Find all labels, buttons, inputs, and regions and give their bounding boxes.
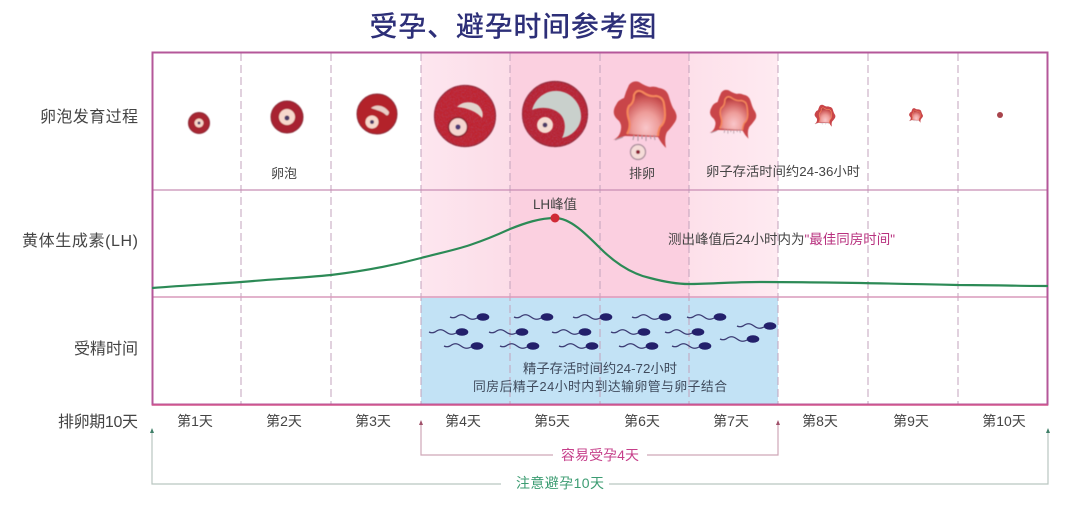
arrow: easy conception range (419, 420, 780, 455)
icon: remnant day 10 (997, 112, 1003, 118)
chart: LH curve (152, 214, 1048, 288)
icon: ruptured follicle day 7 (709, 90, 756, 139)
day labels: 第10天 (982, 413, 1026, 429)
icon: follicle day 2 (271, 101, 303, 133)
title: 受孕、避孕时间参考图 (370, 11, 656, 42)
row label: follicle development: 卵泡发育过程 (40, 108, 138, 126)
icon: ruptured follicle day 6 (613, 81, 677, 148)
icon: released egg (630, 144, 646, 160)
day labels: 第5天 (534, 413, 570, 429)
callout: best timing: 测出峰值后24小时内为"最佳同房时间" (668, 232, 895, 247)
day labels: 第6天 (624, 413, 660, 429)
text: sperm survival: 精子存活时间约24-72小时 (523, 361, 677, 376)
day labels: 第1天 (177, 413, 213, 429)
label: LH peak: LH峰值 (533, 197, 577, 212)
row label: LH: 黄体生成素(LH) (22, 232, 138, 250)
day labels: 第4天 (445, 413, 481, 429)
icon: follicle day 3 (357, 94, 397, 134)
blue fertilisation band (421, 298, 778, 404)
label: follicle: 卵泡 (271, 166, 297, 181)
icon: follicle day 5 (522, 82, 588, 146)
pink highlight bands (421, 53, 778, 298)
label: easy conception 4 days: 容易受孕4天 (561, 447, 639, 463)
day labels (177, 413, 1026, 429)
label: ovulation: 排卵 (629, 166, 655, 181)
label: egg survival: 卵子存活时间约24-36小时 (706, 164, 860, 179)
LH peak marker (550, 214, 560, 222)
day labels: 第7天 (713, 413, 749, 429)
row label: fertilisation time: 受精时间 (74, 340, 138, 358)
panel: chart grid (152, 52, 1048, 405)
day labels: 第8天 (802, 413, 838, 429)
arrow: contraception range (150, 428, 1050, 484)
label: contraception 10 days: 注意避孕10天 (516, 475, 604, 491)
icon: follicle day 4 (434, 86, 496, 146)
text: fertilisation note: 同房后精子24小时内到达输卵管与卵子结合 (473, 379, 727, 394)
row label: ovulation period: 排卵期10天 (58, 413, 138, 431)
icon: sperm group (429, 313, 776, 350)
day labels: 第2天 (266, 413, 302, 429)
icon: ruptured follicle day 8 (814, 105, 835, 127)
chart frame (152, 52, 1048, 404)
day labels: 第9天 (893, 413, 929, 429)
day labels: 第3天 (355, 413, 391, 429)
icon: follicle day 1 (188, 112, 210, 134)
icon: ruptured follicle day 9 (909, 108, 923, 123)
